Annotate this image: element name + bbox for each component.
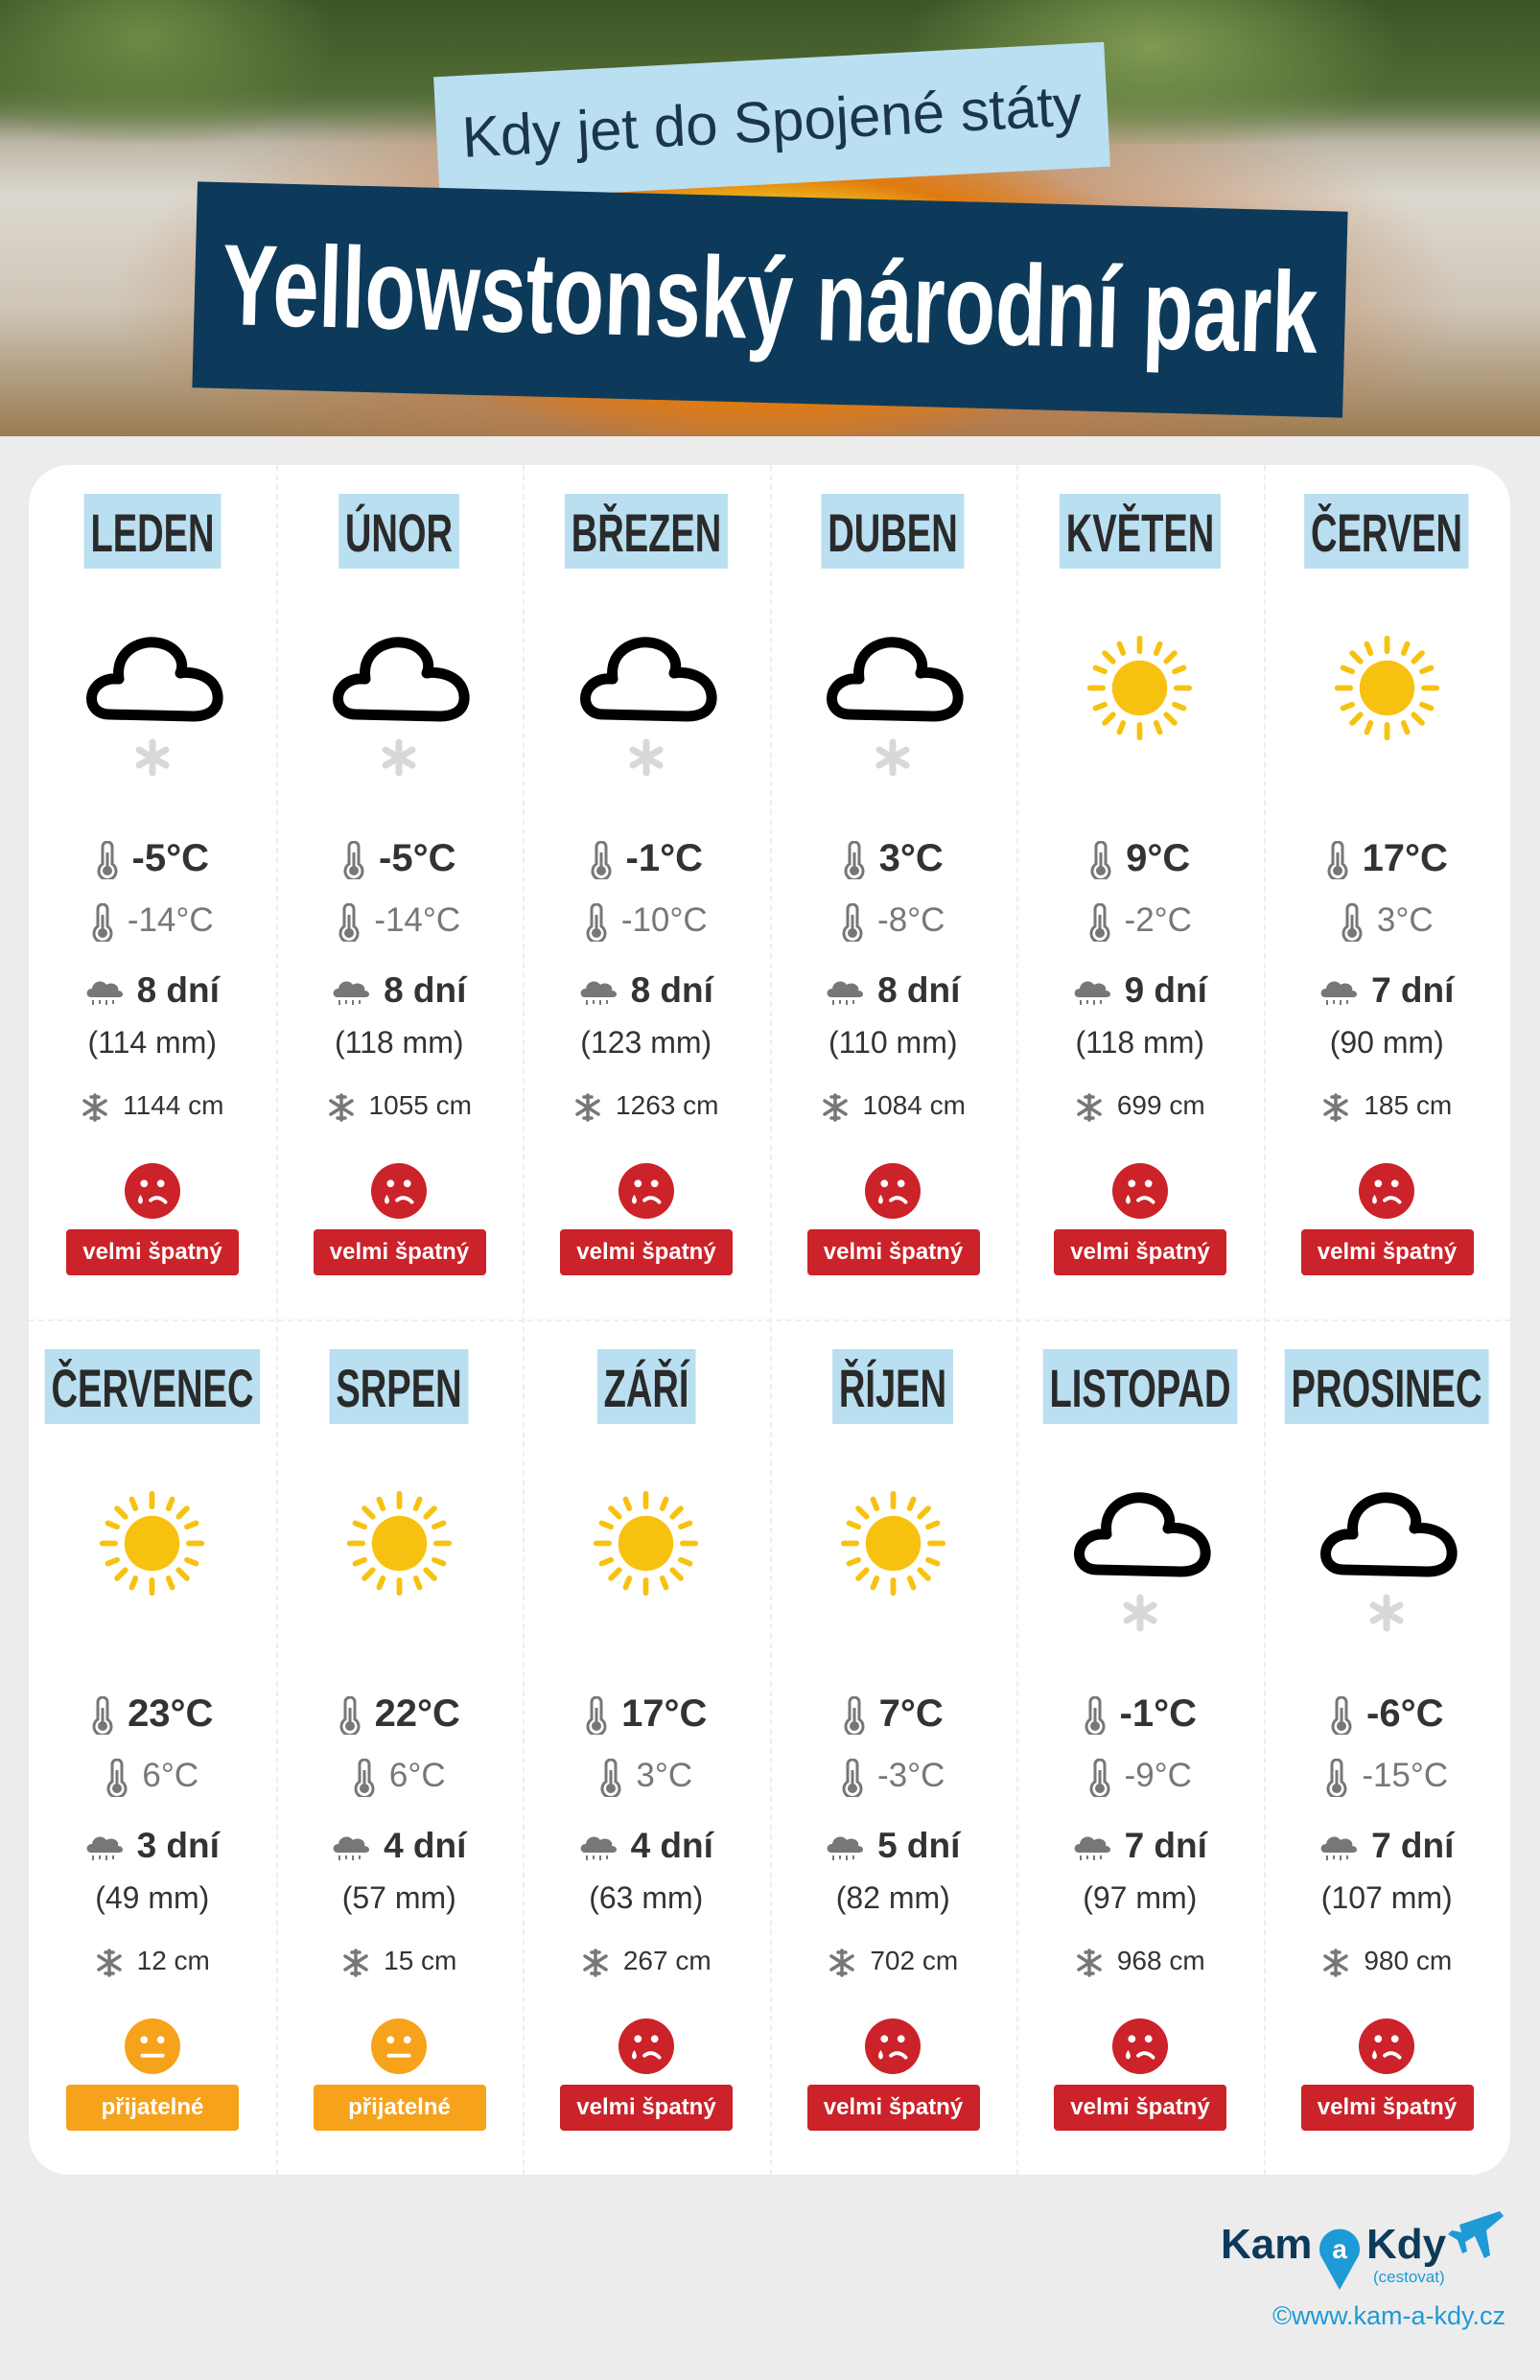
panel: LEDEN: velmi špatný [82,1239,222,1265]
panel: KVĚTEN: -2°C [1125,901,1192,939]
panel: PROSINEC: -15°C [1362,1757,1448,1794]
panel: SRPEN: přijatelné [348,2094,451,2120]
panel: DUBEN: DUBEN [828,502,958,563]
panel: LISTOPAD: -1°C [1120,1692,1197,1735]
panel: ŘÍJEN: 5 dní [877,1826,960,1865]
panel: LISTOPAD: -9°C [1125,1757,1192,1794]
panel: LISTOPAD: 7 dní [1125,1826,1207,1865]
panel: LEDEN: -5°C [132,837,209,879]
panel: ÚNOR: ÚNOR [345,502,453,563]
panel: PROSINEC: PROSINEC [1292,1358,1482,1418]
panel: SRPEN: 15 cm [384,1946,456,1975]
panel: DUBEN: 3°C [879,837,944,879]
panel: PROSINEC: 7 dní [1371,1826,1454,1865]
panel: ŘÍJEN: 702 cm [870,1946,958,1975]
panel: DUBEN: 8 dní [877,970,960,1010]
panel: LEDEN: 1144 cm [123,1090,223,1120]
panel: ZÁŘÍ: (63 mm) [589,1880,703,1915]
panel: SRPEN: SRPEN [337,1358,462,1418]
subtitle: Kdy jet do Spojené státy [460,73,1084,170]
subtitle [433,42,1110,201]
panel: PROSINEC [1285,1349,1489,2131]
panel: ČERVENEC [44,1349,261,2131]
panel: ÚNOR [314,494,486,1275]
panel: ŘÍJEN: -3°C [877,1757,945,1794]
panel: LEDEN: -14°C [128,901,214,939]
panel: LEDEN [66,494,239,1275]
panel: DUBEN: (110 mm) [828,1025,958,1060]
panel: DUBEN: 1084 cm [863,1090,966,1120]
panel: BŘEZEN: (123 mm) [580,1025,712,1060]
panel: SRPEN: 6°C [389,1757,446,1794]
panel: ÚNOR: 1055 cm [369,1090,472,1120]
panel: ŘÍJEN: velmi špatný [824,2094,963,2120]
panel: ČERVENEC: 3 dní [137,1826,220,1865]
panel: ČERVENEC: 12 cm [137,1946,210,1975]
panel: ŘÍJEN: (82 mm) [836,1880,950,1915]
panel: ZÁŘÍ: 17°C [621,1692,707,1735]
panel: ÚNOR: -5°C [379,837,455,879]
title [192,181,1348,418]
panel: ČERVEN: velmi špatný [1318,1239,1457,1265]
panel: ČERVENEC: 6°C [142,1757,198,1794]
panel: LISTOPAD [1043,1349,1237,2131]
panel: DUBEN: velmi špatný [824,1239,963,1265]
panel: ČERVEN [1301,494,1474,1275]
panel: SRPEN: 4 dní [384,1826,466,1865]
panel: BŘEZEN: velmi špatný [576,1239,716,1265]
title: Yellowstonský národní park [221,221,1319,378]
panel: KVĚTEN: 9 dní [1125,970,1207,1010]
panel: ŘÍJEN [807,1349,980,2131]
logo: Kam a Kdy: Kdy [1366,2221,1447,2268]
panel: ČERVEN: ČERVEN [1311,502,1462,563]
panel: BŘEZEN: -10°C [621,901,708,939]
panel: LISTOPAD: velmi špatný [1070,2094,1210,2120]
panel: ÚNOR: (118 mm) [335,1025,464,1060]
panel: ČERVEN: (90 mm) [1330,1025,1444,1060]
panel: SRPEN: (57 mm) [342,1880,456,1915]
panel: ÚNOR: 8 dní [384,970,466,1010]
header photo [0,0,1540,436]
logo: Kam a Kdy: (cestovat) [1373,2268,1445,2286]
panel: DUBEN: -8°C [877,901,945,939]
panel: LISTOPAD: (97 mm) [1083,1880,1197,1915]
panel: ZÁŘÍ: 4 dní [631,1826,713,1865]
panel: BŘEZEN: 8 dní [631,970,713,1010]
panel: KVĚTEN [1054,494,1226,1275]
panel: KVĚTEN: (118 mm) [1075,1025,1204,1060]
panel: LEDEN: (114 mm) [87,1025,217,1060]
panel: KVĚTEN: 699 cm [1117,1090,1205,1120]
panel: LISTOPAD: LISTOPAD [1049,1358,1230,1418]
panel: ČERVENEC: ČERVENEC [51,1358,253,1418]
panel: LEDEN: 8 dní [137,970,220,1010]
panel: ČERVENEC: 23°C [128,1692,213,1735]
panel: ČERVEN: 3°C [1377,901,1434,939]
panel: LEDEN: LEDEN [90,502,214,563]
panel: ČERVEN: 185 cm [1364,1090,1452,1120]
panel: ŘÍJEN: ŘÍJEN [839,1358,946,1418]
panel: ÚNOR: velmi špatný [330,1239,469,1265]
panel: KVĚTEN: KVĚTEN [1066,502,1214,563]
panel: monthly climate card [29,465,1510,2175]
panel: DUBEN [807,494,980,1275]
panel: BŘEZEN: 1263 cm [616,1090,718,1120]
panel: KVĚTEN: velmi špatný [1070,1239,1210,1265]
panel: BŘEZEN [560,494,733,1275]
panel: ČERVENEC: přijatelné [102,2094,203,2120]
panel: PROSINEC: velmi špatný [1318,2094,1457,2120]
panel: PROSINEC: -6°C [1366,1692,1443,1735]
panel: KVĚTEN: 9°C [1126,837,1190,879]
panel: ZÁŘÍ: 3°C [636,1757,692,1794]
logo: Kam a Kdy [1221,2211,1504,2290]
panel: PROSINEC: (107 mm) [1321,1880,1453,1915]
panel: ZÁŘÍ [560,1349,733,2131]
panel: PROSINEC: 980 cm [1364,1946,1452,1975]
panel: ČERVEN: 7 dní [1371,970,1454,1010]
panel: ZÁŘÍ: 267 cm [623,1946,712,1975]
panel: ČERVENEC: (49 mm) [95,1880,209,1915]
panel: ZÁŘÍ: velmi špatný [576,2094,716,2120]
panel: BŘEZEN: -1°C [626,837,703,879]
panel: SRPEN [314,1349,486,2131]
panel: BŘEZEN: BŘEZEN [571,502,721,563]
logo: Kam a Kdy: a [1332,2234,1347,2264]
panel: ZÁŘÍ: ZÁŘÍ [603,1358,688,1418]
logo: Kam a Kdy: Kam [1221,2221,1312,2268]
panel: SRPEN: 22°C [375,1692,460,1735]
panel: ÚNOR: -14°C [374,901,460,939]
url: ©www.kam-a-kdy.cz [1272,2301,1505,2330]
panel: LISTOPAD: 968 cm [1117,1946,1205,1975]
panel: ČERVEN: 17°C [1363,837,1448,879]
panel: ŘÍJEN: 7°C [879,1692,944,1735]
